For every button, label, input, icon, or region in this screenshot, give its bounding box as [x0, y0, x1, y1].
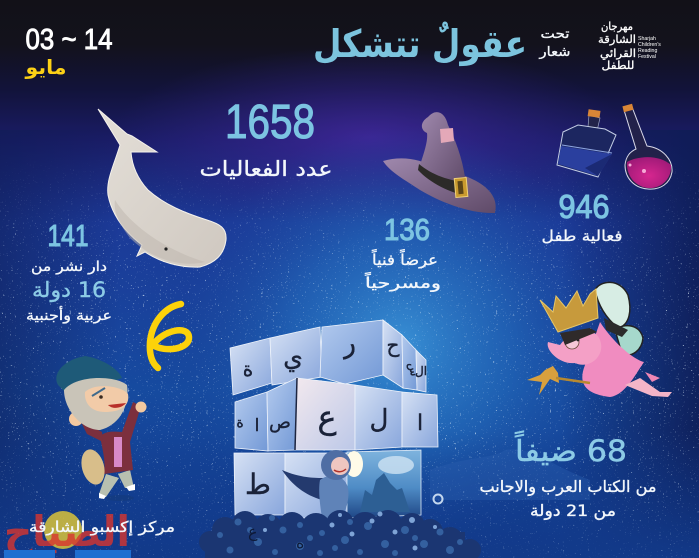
cube letters: س — [406, 362, 420, 377]
stat: performances: ومسرحياً — [364, 272, 441, 292]
stat: publishers: 16 دولة — [32, 278, 106, 302]
stat: guests: من 21 دولة — [530, 501, 616, 521]
cube letters — [236, 327, 427, 500]
cube letters: ح — [387, 335, 400, 357]
cube letters: ي — [283, 344, 303, 372]
stat: child events — [542, 188, 622, 245]
festival logo: مهرجان — [601, 20, 633, 33]
dates: مايو — [24, 55, 66, 79]
cube: middle row — [235, 378, 438, 451]
festival logo: Sharjah — [638, 36, 656, 42]
festival logo: الشارقة — [598, 33, 636, 46]
dates: 03 ~ 14 — [26, 24, 112, 56]
festival logo: Children's — [638, 42, 661, 48]
slogan label: شعار — [538, 45, 570, 60]
stat: child events: فعالية طفل — [542, 227, 622, 245]
cube letters: ط — [245, 469, 271, 500]
window clouds — [378, 456, 414, 474]
icon: yellow squiggle — [150, 304, 189, 368]
cube letters: ا — [417, 410, 423, 435]
clouds — [199, 494, 481, 558]
stat: publishers: 141 — [48, 218, 88, 253]
icon: whale — [98, 109, 226, 267]
icon: fairy character — [527, 282, 672, 397]
glow — [345, 451, 363, 477]
cube letters: ل — [370, 404, 388, 434]
dates — [24, 24, 112, 79]
festival logo: Reading — [638, 48, 657, 54]
watermark: الصباح — [4, 507, 130, 556]
cube letters: ة — [243, 359, 253, 381]
stat: publishers — [26, 218, 112, 324]
stat: performances: عرضاً فنياً — [371, 249, 438, 269]
festival logo: القرائي — [600, 47, 636, 60]
expo centre caption: مركز إكسبو الشارقة — [29, 518, 175, 536]
stat: total events: عدد الفعاليات — [200, 157, 332, 181]
stat: total events: 1658 — [225, 96, 315, 149]
festival logo — [598, 20, 661, 72]
slogan label — [538, 27, 570, 60]
clouds: ع — [248, 524, 258, 542]
slogan title: عقولٌ تتشكل — [313, 22, 527, 66]
clouds: ه — [296, 535, 304, 552]
stat: performances: 136 — [384, 212, 430, 247]
stat: publishers: دار نشر من — [31, 259, 107, 275]
festival logo: للطفل — [602, 59, 634, 72]
icon: potion bottles — [557, 104, 672, 189]
cube letters: ة — [236, 414, 244, 430]
stat: publishers: عربية وأجنبية — [26, 306, 112, 324]
icon: wizard hat — [383, 112, 496, 213]
hero character — [282, 450, 351, 518]
cube letters: ال — [415, 364, 427, 378]
cube stack — [230, 320, 438, 518]
cube letters: ر — [338, 327, 357, 360]
festival logo: Festival — [638, 54, 656, 60]
cube: top row — [230, 320, 426, 395]
castle in window — [360, 473, 410, 512]
cube: bottom row — [234, 450, 421, 518]
icon: boy character — [56, 356, 146, 501]
stat: performances — [364, 212, 441, 292]
stat: guests — [480, 431, 656, 521]
slogan label: تحت — [540, 27, 570, 42]
stat: total events — [200, 96, 332, 181]
cube letters: ص — [269, 412, 291, 433]
stat: child events: 946 — [558, 188, 610, 225]
stat: guests: من الكتاب العرب والاجانب — [480, 477, 656, 497]
cube letters: ا — [255, 416, 259, 435]
cube letters: ع — [317, 399, 337, 436]
stat: guests: 68 ضيفاً — [515, 431, 627, 468]
